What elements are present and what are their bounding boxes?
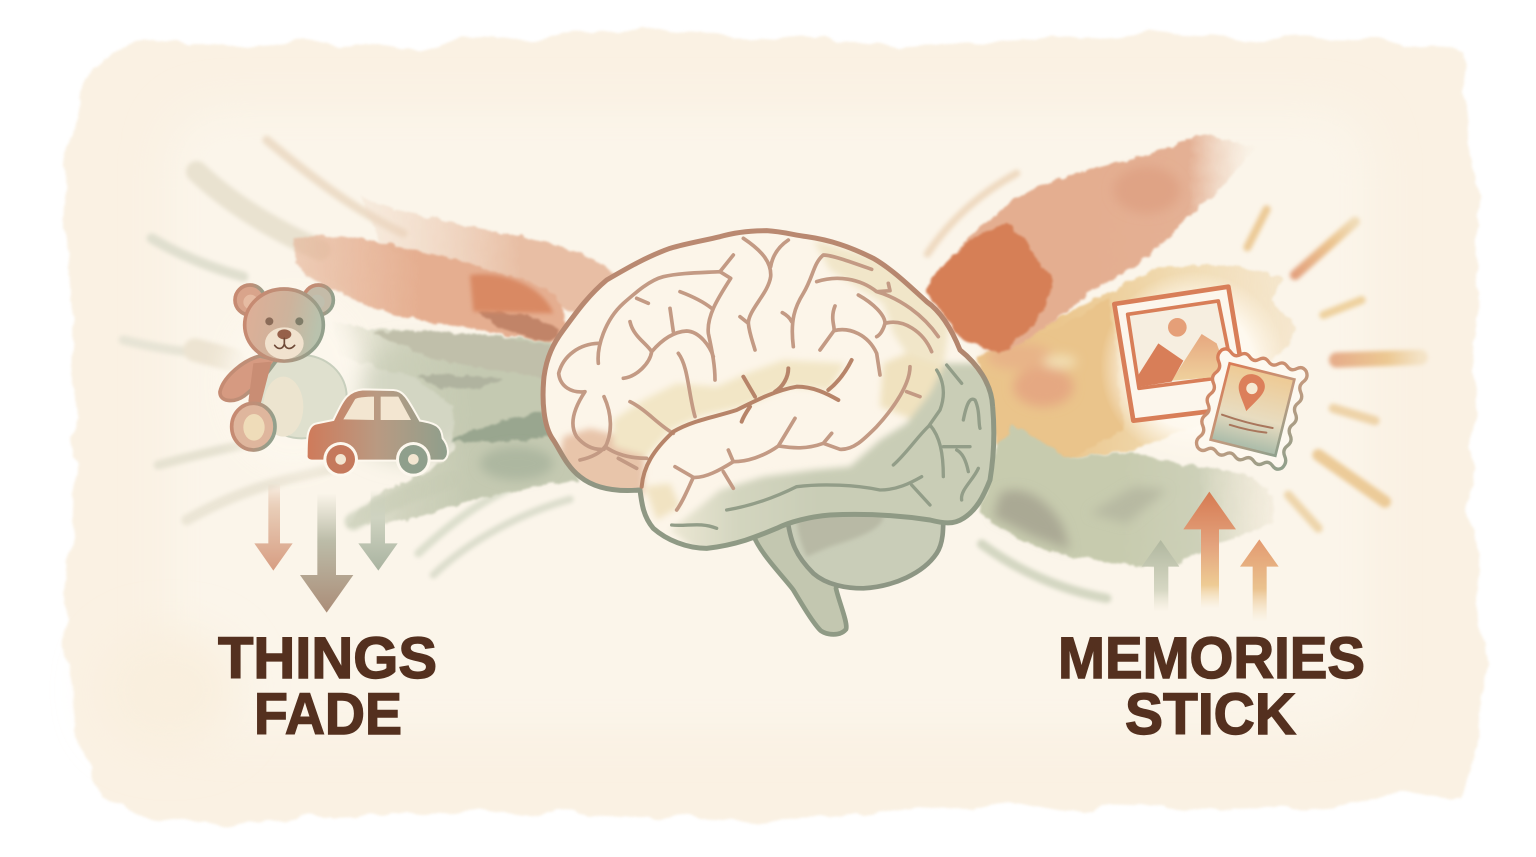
sage wash stroke [980,425,1273,567]
sage wash dark blooms [993,487,1167,550]
sand wash stroke [977,265,1297,460]
title: Memories Stick: STICK [1125,682,1296,747]
car windows [343,397,411,420]
stamp road lines [1220,415,1273,435]
upper sulci [559,238,938,510]
arrow: sage up [1142,540,1179,612]
lateral fissure [642,360,852,487]
sage wash mottled core [480,447,553,480]
lower sulci [672,365,980,528]
arrow: orange up [1240,539,1279,622]
arrow: sage down [358,490,398,571]
car wheels [323,442,431,477]
title: Things Fade [218,626,437,747]
arrow: small red down [254,483,293,571]
red wash bloom [1113,167,1180,213]
red wash dark core [470,274,553,313]
title: Memories Stick [1058,626,1365,747]
white glow behind toys [223,297,363,470]
cerebellum shadow [797,513,884,557]
stamp picture [1211,363,1294,456]
cerebellum [787,513,943,588]
faded streaks [123,140,570,575]
title: Things Fade: FADE [254,682,402,747]
brainstem [753,507,863,634]
icon: brain illustration [543,231,1003,634]
cerebrum fill [543,231,994,548]
cerebrum outline [543,231,994,548]
map pin [1233,372,1267,414]
glow behind keepsakes [1100,272,1287,462]
icon: polaroid photo [1114,287,1248,421]
icon: toy car [307,389,448,477]
photo sun [1168,318,1187,337]
sage soft underlayer [340,347,487,460]
red wash stroke [925,135,1257,353]
arrow: large brown down [300,493,353,613]
sage wash stroke [333,323,580,527]
title: Memories Stick: MEMORIES [1058,626,1365,691]
decorative sun rays [927,173,1420,598]
red wash stroke [293,197,617,345]
icon: postage stamp with pin [1195,347,1309,471]
cerebrum colour wash [557,240,1003,557]
icon: teddy bear [220,285,347,450]
panel: lasting memories side (zoom-space group) [925,135,1420,622]
arrow: large red up [1183,492,1236,608]
sand wash blush [987,343,1077,407]
title: Things Fade: THINGS [218,626,437,691]
panel: fading things side (zoom-space group) [123,140,617,613]
photo mountains [1172,334,1228,381]
